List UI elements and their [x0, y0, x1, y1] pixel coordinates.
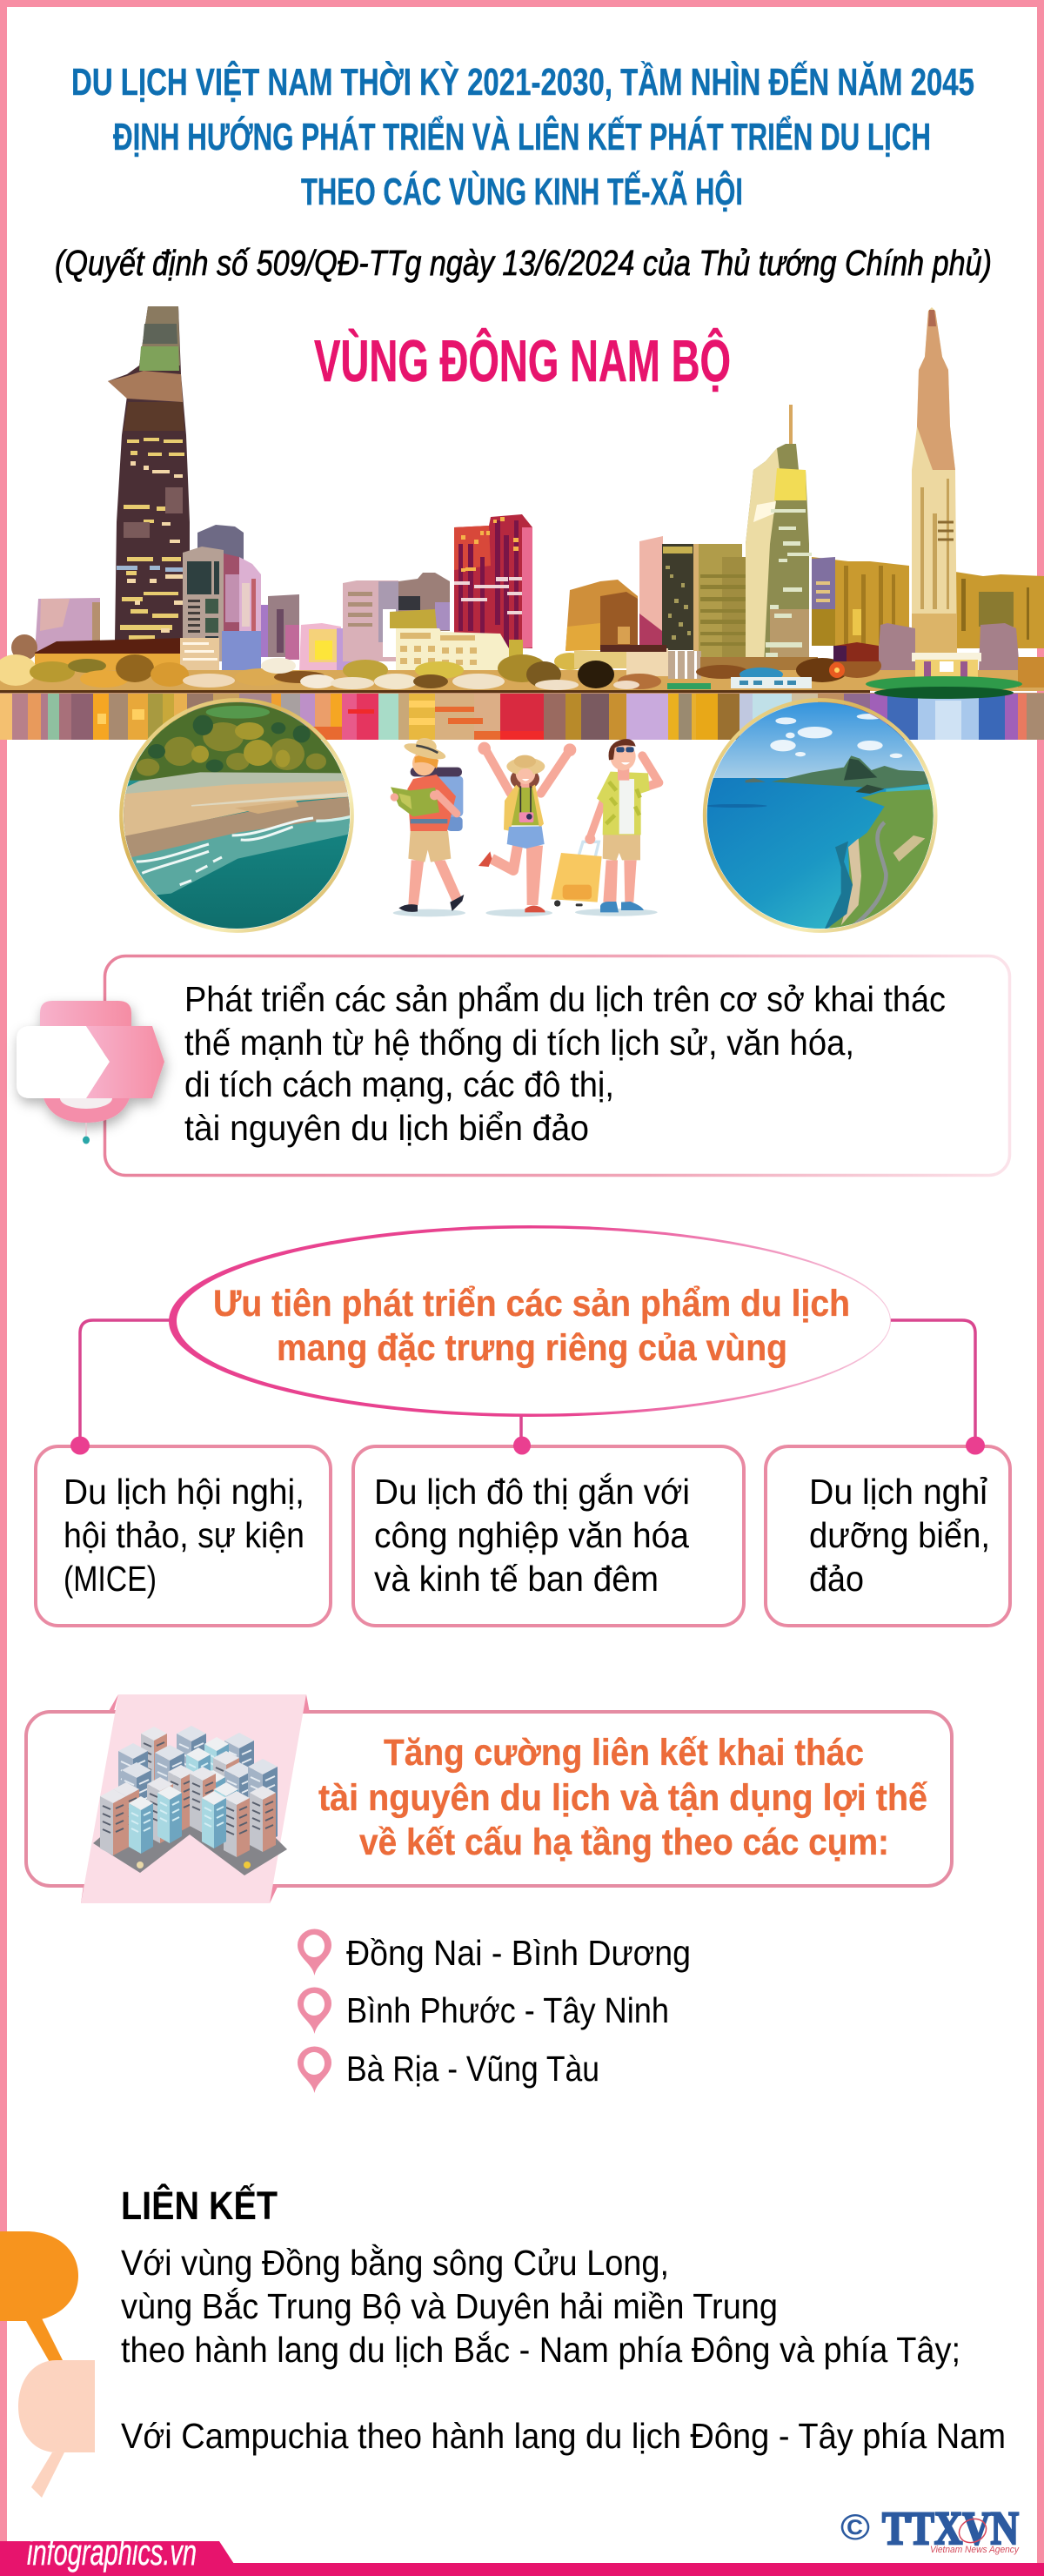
panel: cluster linkage [26, 1694, 952, 1903]
card: urban tourism: và kinh tế ban đêm [374, 1559, 659, 1599]
statement text: thế mạnh từ hệ thống di tích lịch sử, văn hóa, [184, 1023, 854, 1063]
pink-purple towers [224, 553, 299, 670]
green island [866, 676, 1022, 699]
statement text [184, 979, 946, 1148]
riverside pavilion [912, 653, 981, 677]
logo: TTXVN [840, 2502, 1020, 2555]
grey-purple building behind [197, 525, 244, 561]
card: MICE tourism [36, 1446, 331, 1626]
card: MICE tourism: Du lịch hội nghị, [64, 1472, 304, 1512]
river reflection [0, 693, 1044, 740]
section: links with other regions: vùng Bắc Trung Bộ và Duyên hải miền Trung [121, 2286, 778, 2326]
illustration: three tourists [391, 736, 659, 916]
beige high-rise [183, 547, 224, 661]
connector lines from priority ellipse [80, 1320, 975, 1446]
golden low-rise block [812, 557, 909, 646]
logo: TTXVN: TTXVN [882, 2502, 1019, 2554]
card: MICE tourism: hội thảo, sự kiện [64, 1515, 304, 1555]
heading: region name: VÙNG ĐÔNG NAM BỘ [314, 327, 731, 394]
decoration: orange and peach lollipop shapes [0, 2231, 95, 2498]
priority heading text [213, 1283, 850, 1369]
card: MICE tourism: (MICE) [64, 1559, 157, 1599]
tall spired tower [746, 405, 812, 666]
logo: TTXVN: Vietnam News Agency [930, 2545, 1020, 2555]
item: Đồng Nai - Bình Dương: Đồng Nai - Bình Dương [346, 1933, 691, 1973]
pink and taupe mid-rise [343, 573, 450, 661]
shoreline edge [0, 690, 870, 693]
section: links with other regions [121, 2184, 1006, 2456]
section: links with other regions: Với vùng Đồng bằng sông Cửu Long, [121, 2243, 669, 2283]
title [71, 60, 974, 213]
pink building with yellow glow [299, 623, 356, 672]
priority heading text: Ưu tiên phát triển các sản phẩm du lịch [213, 1283, 850, 1325]
panel: product development statement [17, 956, 1009, 1175]
red tower [454, 514, 532, 648]
purple low blocks [877, 623, 1020, 670]
tourist with suitcase [551, 739, 659, 916]
orange building [566, 580, 638, 651]
tour boat [667, 667, 812, 689]
card: urban tourism: Du lịch đô thị gắn với [374, 1472, 690, 1512]
footer bar with site name [0, 2532, 1044, 2576]
statement text: tài nguyên du lịch biển đảo [184, 1108, 589, 1148]
cluster list [298, 1929, 691, 2093]
pink ribbon behind buildings [81, 1694, 310, 1903]
cluster heading text: tài nguyên du lịch và tận dụng lợi thế [318, 1777, 927, 1819]
logo: TTXVN: © [840, 2506, 870, 2547]
cluster heading text [318, 1732, 927, 1863]
left low pink building [11, 598, 100, 661]
icon: pink arrow tab [17, 1001, 164, 1123]
section: links with other regions: theo hành lang du lịch Bắc - Nam phía Đông và phía Tây; [121, 2330, 960, 2370]
connector dots [70, 1436, 985, 1455]
pink and dark high-rises [639, 536, 694, 650]
tourist with map [391, 736, 465, 916]
gold block at right [955, 572, 1044, 648]
shoreline foliage [0, 642, 1044, 691]
card: sea resort tourism: dưỡng biển, [809, 1515, 990, 1555]
Landmark 81 tower [912, 307, 957, 654]
statement text: di tích cách mạng, các đô thị, [184, 1064, 614, 1104]
photo: island coastline [696, 696, 940, 940]
item: Bà Rịa - Vũng Tàu [298, 2047, 599, 2093]
statement text: Phát triển các sản phẩm du lịch trên cơ sở khai thác [184, 979, 946, 1019]
cream colonial hotel [383, 609, 523, 674]
title: THEO CÁC VÙNG KINH TẾ-XÃ HỘI [301, 169, 743, 213]
priority heading text: mang đặc trưng riêng của vùng [277, 1327, 787, 1369]
olive high-rises [693, 544, 760, 657]
card: urban tourism: công nghiệp văn hóa [374, 1515, 689, 1555]
icon: isometric city blocks [93, 1726, 287, 1875]
card: sea resort tourism: đảo [809, 1559, 864, 1599]
card: urban tourism [353, 1446, 744, 1626]
priority ellipse [169, 1225, 891, 1417]
cluster heading text: về kết cấu hạ tầng theo các cụm: [359, 1821, 889, 1863]
cluster heading text: Tăng cường liên kết khai thác [384, 1732, 864, 1774]
item: Bình Phước - Tây Ninh [298, 1988, 669, 2034]
item: Bình Phước - Tây Ninh: Bình Phước - Tây Ninh [346, 1990, 669, 2030]
card: sea resort tourism: Du lịch nghỉ [809, 1472, 987, 1512]
illustration: city skyline with river reflection [0, 306, 1044, 740]
brown roof and yellow base [35, 631, 261, 690]
item: Bà Rịa - Vũng Tàu: Bà Rịa - Vũng Tàu [346, 2049, 599, 2089]
jumping tourist [478, 742, 576, 916]
photo: beach and forest [113, 696, 357, 940]
card: sea resort tourism [766, 1446, 1010, 1626]
section: links with other regions: LIÊN KẾT [121, 2184, 278, 2228]
footer bar with site name: infographics.vn [27, 2532, 197, 2573]
icon: teal pin dot [83, 1123, 90, 1144]
Bitexco tower [108, 306, 190, 641]
